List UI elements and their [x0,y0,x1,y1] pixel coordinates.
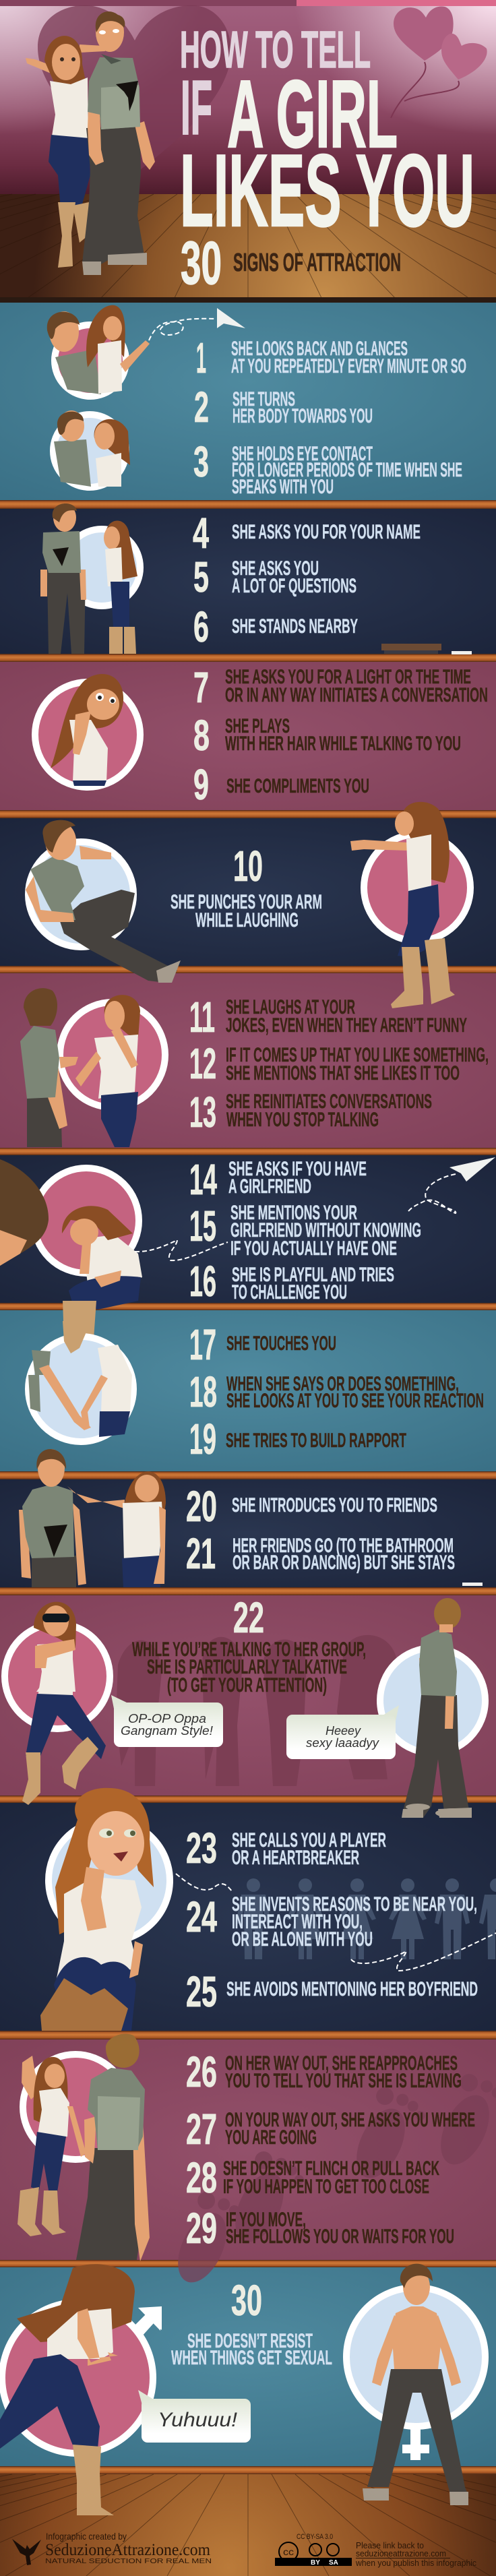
header wall [0,0,496,194]
sign 21 [186,1529,455,1578]
sign 23: SHE CALLS YOU A PLAYER [232,1829,386,1851]
sign 8: 8 [193,711,210,760]
illustration: thoughtful girl close-up [40,1788,170,2031]
sign 20: 20 [186,1482,217,1531]
sign 13: WHEN YOU STOP TALKING [226,1109,379,1131]
sign 24 [186,1893,477,1951]
title [180,21,474,297]
footprints background [164,2070,496,2294]
big heart behind characters [38,5,231,174]
speech bubble: Yuhuuu [138,2390,251,2443]
sign 17: SHE TOUCHES YOU [226,1332,336,1355]
sign 21: 21 [186,1529,216,1578]
sign 7 [193,663,488,712]
sign 28 [186,2153,439,2202]
sign 20 [186,1482,437,1531]
signs 17-19 block [28,1320,484,1463]
sign 10 text: WHILE LAUGHING [195,909,299,931]
sign 12: 12 [189,1039,216,1088]
panel: signs 11-13 maroon [0,973,496,1148]
licence badge: CC BY-SA 3.0 [297,2533,333,2541]
licence badge: cc [283,2546,294,2557]
icon: heart balloons [391,7,487,118]
sign 3: SHE HOLDS EYE CONTACT [232,443,373,465]
sign 22 block [5,1593,485,1818]
sign 29 [186,2204,454,2252]
sign 27: 27 [186,2105,217,2153]
sign 16 [189,1257,394,1306]
sign 19 [189,1415,406,1463]
sign 6: SHE STANDS NEARBY [232,615,358,638]
speech bubble: Heeey sexy laaadyy: sexy laaadyy [306,1736,379,1750]
sign 4 [193,509,421,557]
sign 5: A LOT OF QUESTIONS [232,575,356,597]
sign 15: SHE MENTIONS YOUR [230,1202,357,1224]
sign 22 text: SHE IS PARTICULARLY TALKATIVE [147,1656,347,1678]
sign 10 text: 10 [233,842,263,890]
sign 9: SHE COMPLIMENTS YOU [226,775,369,797]
sign 9: 9 [193,760,209,809]
speech bubble: Gangnam Style [111,1695,223,1747]
sign 19: 19 [189,1415,216,1463]
illustration: girl with hand on boy's shoulder [19,1449,166,1587]
sign 8: SHE PLAYS [225,715,290,737]
sign 26: 26 [186,2048,217,2096]
sign 5: SHE ASKS YOU [232,557,319,580]
sign 11: 11 [189,993,215,1041]
sign 3 [193,437,462,498]
sign 14: 14 [189,1155,217,1204]
credit: SeduzioneAttrazione.com: Infographic created by [46,2531,127,2542]
credit: SeduzioneAttrazione.com: NATURAL SEDUCTION FOR REAL MEN [45,2558,212,2565]
panel: signs 20-21 navy [0,1479,496,1587]
title: 30 [181,230,222,297]
illustration: couple standing in front of circle [40,503,140,654]
credit: SeduzioneAttrazione.com: SeduzioneAttrazione.com [45,2541,211,2559]
sign 8 [193,711,461,760]
illustration: boy knocked back [26,820,181,983]
licence badge: SA [329,2559,338,2567]
illustration: girl running in circle with male symbol [0,2264,162,2515]
sign 24: 24 [186,1893,217,1941]
sign 14: SHE ASKS IF YOU HAVE [228,1158,367,1180]
sign 11: SHE LAUGHS AT YOUR [226,996,355,1018]
character: boy [82,11,155,275]
sign 13: 13 [189,1088,216,1136]
header floor [0,194,496,299]
silhouettes of friends [116,1635,398,1786]
illustration: couple talking [20,988,165,1147]
sign 30 text: 30 [231,2276,262,2325]
sign 15 [189,1202,421,1260]
signs 14-16 block [0,1155,495,1353]
sign 16: SHE IS PLAYFUL AND TRIES [232,1264,394,1286]
speech bubble: Heeey sexy laaadyy [286,1705,399,1759]
shelves between panels [0,500,496,2474]
illustration: shirtless boy with female symbol [346,2264,485,2505]
sign 1 [196,334,466,382]
link back note [355,2540,476,2568]
sign 10 block [26,802,470,1008]
illustration: girl waving and boy from behind [18,2034,150,2261]
panel: sign 10 navy [0,818,496,966]
sign 2: SHE TURNS [232,388,295,410]
sign 3: SPEAKS WITH YOU [232,476,334,498]
sign 18 [189,1368,484,1416]
illustration: sign 1 circle with couple [47,305,150,396]
sign 23: OR A HEARTBREAKER [232,1847,359,1869]
character: girl [26,36,105,268]
link back note: when you publish this infographic [355,2558,476,2568]
sign 30 text: SHE DOESN’T RESIST [187,2330,313,2352]
panel: sign 30 teal [0,2267,496,2466]
sign 6: 6 [193,603,209,651]
sign 26 [186,2048,462,2096]
icon: paper plane with dashed trail [408,1157,495,1213]
sign 28: 28 [186,2153,217,2202]
sign 6 [193,603,358,651]
illustration: hands touching in circle [28,1321,133,1442]
shoes of boy from above [406,1804,470,1818]
credit: SeduzioneAttrazione.com [45,2531,212,2565]
sign 23: 23 [186,1824,217,1872]
illustration: sign 2-3 circle with couple [53,410,130,487]
sign 30 text [171,2276,332,2369]
icon: paper plane with dashed trail [149,308,245,340]
sign 22 text [132,1593,366,1696]
sign 16: TO CHALLENGE YOU [232,1281,347,1304]
footer credits [12,2531,476,2568]
signs 11-13 block [20,988,489,1147]
panel: signs 17-19 teal [0,1310,496,1471]
sign 24: OR BE ALONE WITH YOU [232,1928,373,1951]
speech bubble: Gangnam Style: OP-OP Oppa [128,1712,206,1725]
sign 2: 2 [194,383,209,431]
illustration: girl punching [350,802,470,1008]
signs 4-6 block [40,503,472,654]
header illustration and title [26,5,487,297]
sign 10 text: SHE PUNCHES YOUR ARM [170,891,322,913]
illustration: crouching girl with boy's head in the foreground [0,1159,142,1353]
sign 2: HER BODY TOWARDS YOU [232,405,373,427]
books and chalk on shelf [381,644,472,654]
panel: signs 7-9 maroon [0,662,496,810]
dashed trail from girl [135,1240,228,1260]
sign 10 text [170,842,322,931]
licence badge: BY [311,2559,320,2567]
signs 1-3 block [47,305,466,498]
dashed trails [176,1874,496,1971]
panel: sign 22 maroon [0,1595,496,1796]
sign 25: 25 [186,1967,217,2016]
sign 7: 7 [193,663,209,712]
sign 4: 4 [193,509,209,557]
sign 15: 15 [189,1202,216,1250]
panel: signs 23-25 navy [0,1803,496,2031]
sign 5: 5 [193,553,209,601]
sign 24: INTEREACT WITH YOU, [232,1911,363,1933]
chalk [462,1583,483,1586]
link back note: Please link back to [356,2540,424,2550]
sign 11 [189,993,467,1041]
signs 20-21 block [19,1449,483,1587]
title: IF [181,65,212,151]
sign 1: 1 [196,334,206,382]
sign 30 block [0,2264,485,2515]
sign 12 [189,1039,489,1088]
sign 17 [189,1320,336,1369]
licence badge [275,2533,352,2567]
sign 14: A GIRLFRIEND [228,1175,311,1198]
sign 5 [193,553,356,601]
illustration: boy from behind [380,1598,485,1818]
signs 23-25 block [40,1788,496,2031]
panel: signs 14-16 navy [0,1155,496,1303]
sign 27: YOU ARE GOING [225,2126,317,2149]
sign 17: 17 [189,1320,216,1369]
sign 23 [186,1824,386,1872]
illustration: girl in pink circle playing with hair [35,674,140,787]
link back note: seduzioneattrazione.com [356,2548,446,2558]
speech bubble: Heeey sexy laaadyy: Heeey [326,1724,361,1738]
panel: signs 4-6 navy [0,509,496,654]
sign 22 text: (TO GET YOUR ATTENTION) [167,1674,327,1696]
icon: winged logo [12,2539,41,2565]
signs 7-9 block [35,663,488,809]
sign 14 [189,1155,367,1204]
sign 18: 18 [189,1368,217,1416]
sign 2 [194,383,373,431]
sign 30 text: WHEN THINGS GET SEXUAL [171,2347,332,2369]
sign 9 [193,760,369,809]
sign 13 [189,1088,432,1136]
sign 29: 29 [186,2204,217,2252]
pictograms: crowd of people [236,1878,496,1959]
sign 22 text: 22 [233,1593,264,1642]
sign 27 [186,2105,475,2153]
illustration: girl dancing with sunglasses [5,1602,110,1805]
speech bubble: Yuhuuu: Yuhuuu! [158,2409,238,2431]
sign 25 [186,1967,478,2016]
footer floor [0,2474,496,2576]
speech bubble: Gangnam Style: Gangnam Style! [121,1724,213,1738]
signs 26-29 block [18,2034,496,2294]
panel: signs 26-29 maroon [0,2040,496,2260]
sign 29: IF YOU MOVE, [226,2209,306,2231]
panel: signs 1-3 teal [0,303,496,500]
sign 3: 3 [193,437,209,486]
sign 16: 16 [189,1257,216,1306]
